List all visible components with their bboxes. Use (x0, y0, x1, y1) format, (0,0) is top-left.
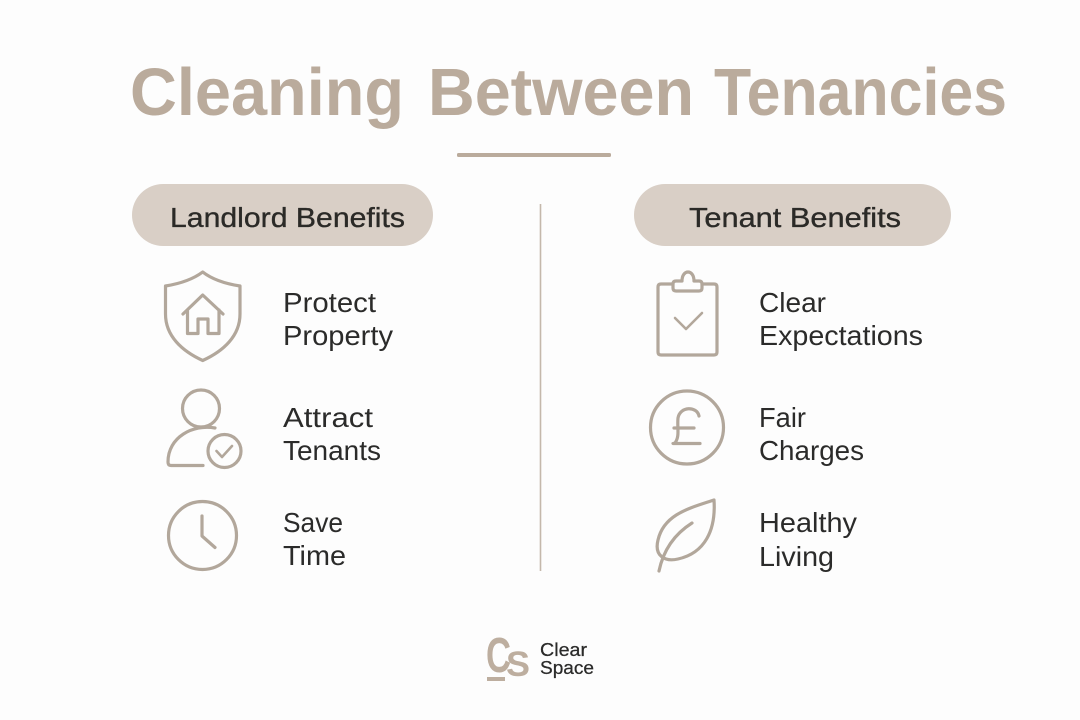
center divider (540, 204, 541, 571)
text: clear expectations: Clear (759, 287, 826, 318)
text: clear expectations: Expectations (759, 320, 923, 351)
text: attract tenants: Tenants (283, 435, 381, 466)
icon: pound coin (650, 391, 724, 464)
text: healthy living: Living (759, 541, 834, 572)
icon: shield with house (166, 272, 240, 360)
icon: leaf (657, 500, 714, 571)
title underline (457, 153, 611, 157)
logo text: Space (540, 657, 594, 678)
logo: Clear Space (486, 629, 594, 684)
heading pill: landlord benefits: Landlord Benefits (170, 202, 405, 233)
logo mark: C (486, 629, 511, 683)
text: protect property: Property (283, 320, 393, 351)
title: Between (428, 55, 694, 130)
text: attract tenants: Attract (283, 402, 373, 433)
logo mark: S (506, 645, 530, 684)
text: save time: Save (283, 507, 343, 538)
text: fair charges: Fair (759, 402, 806, 433)
heading pill: tenant benefits: Tenant Benefits (689, 202, 901, 233)
title: Tenancies (714, 55, 1007, 130)
icon: clipboard with check (658, 272, 717, 355)
text: fair charges: Charges (759, 435, 864, 466)
logo text: Clear (540, 639, 587, 660)
heading pill: tenant benefits (634, 184, 951, 246)
title: Cleaning (130, 55, 404, 130)
icon: clock (168, 502, 236, 570)
text: protect property: Protect (283, 287, 376, 318)
text: healthy living: Healthy (759, 507, 857, 538)
panel: tenant benefits (634, 184, 951, 572)
heading pill: landlord benefits (132, 184, 433, 246)
panel: landlord benefits (132, 184, 433, 571)
text: save time: Time (283, 540, 346, 571)
icon: person with check (168, 390, 241, 468)
